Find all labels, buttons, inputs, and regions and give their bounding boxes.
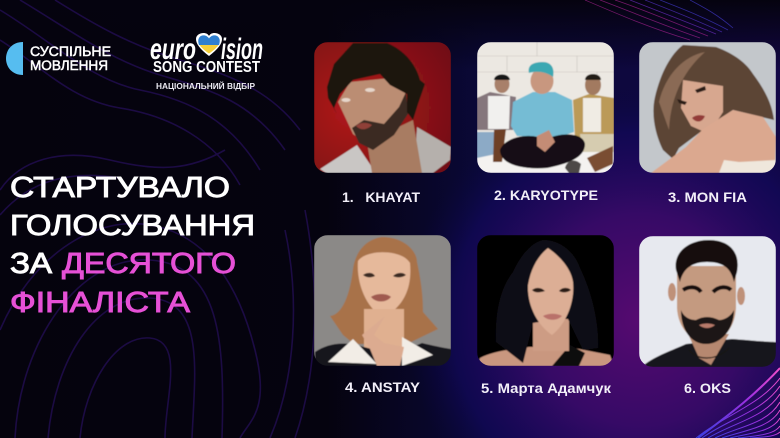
label: 2. Karyotype: 2. KARYOTYPE <box>494 187 598 203</box>
label: 4. Anstay: 4. ANSTAY <box>345 379 421 395</box>
eurovision wordmark: euro <box>150 33 196 66</box>
eurovision wordmark: ision <box>221 33 263 66</box>
title <box>10 172 255 319</box>
title: ГОЛОСУВАННЯ <box>10 210 255 242</box>
title: ДЕСЯТОГО <box>62 248 236 280</box>
photo: Marta Adamchuk <box>477 235 614 366</box>
Suspilne wordmark: МОВЛЕННЯ <box>30 58 108 73</box>
title: ЗА <box>10 248 52 280</box>
label: 5. Marta Adamchuk: 5. Марта Адамчук <box>481 380 612 396</box>
decorative corner lines: top right <box>585 0 733 40</box>
song contest: SONG CONTEST <box>153 59 260 76</box>
Suspilne wordmark: СУСПІЛЬНЕ <box>30 44 111 59</box>
Suspilne wordmark <box>30 44 111 73</box>
label: 6. OKS: 6. OKS <box>684 380 731 396</box>
photo: Karyotype <box>477 42 614 173</box>
icon: blue half disc <box>6 42 23 75</box>
photo: Anstay <box>314 235 451 366</box>
national selection caption: НАЦІОНАЛЬНИЙ ВІДБІР <box>156 82 256 91</box>
photo: OKS <box>639 236 776 367</box>
title: СТАРТУВАЛО <box>10 172 230 204</box>
label: 3. Mon Fia: 3. MON FIA <box>668 189 747 205</box>
eurovision wordmark <box>150 33 263 66</box>
logo: Eurovision Song Contest <box>150 33 263 91</box>
photo: Khayat <box>314 42 451 173</box>
label: 1. Khayat: 1. KHAYAT <box>342 189 420 205</box>
title: ФІНАЛІСТА <box>10 287 190 319</box>
icon: Ukrainian heart <box>196 33 222 56</box>
decorative corner lines: bottom right <box>696 368 780 438</box>
logo: Suspilne <box>6 42 111 75</box>
photo: Mon Fia <box>639 42 776 173</box>
